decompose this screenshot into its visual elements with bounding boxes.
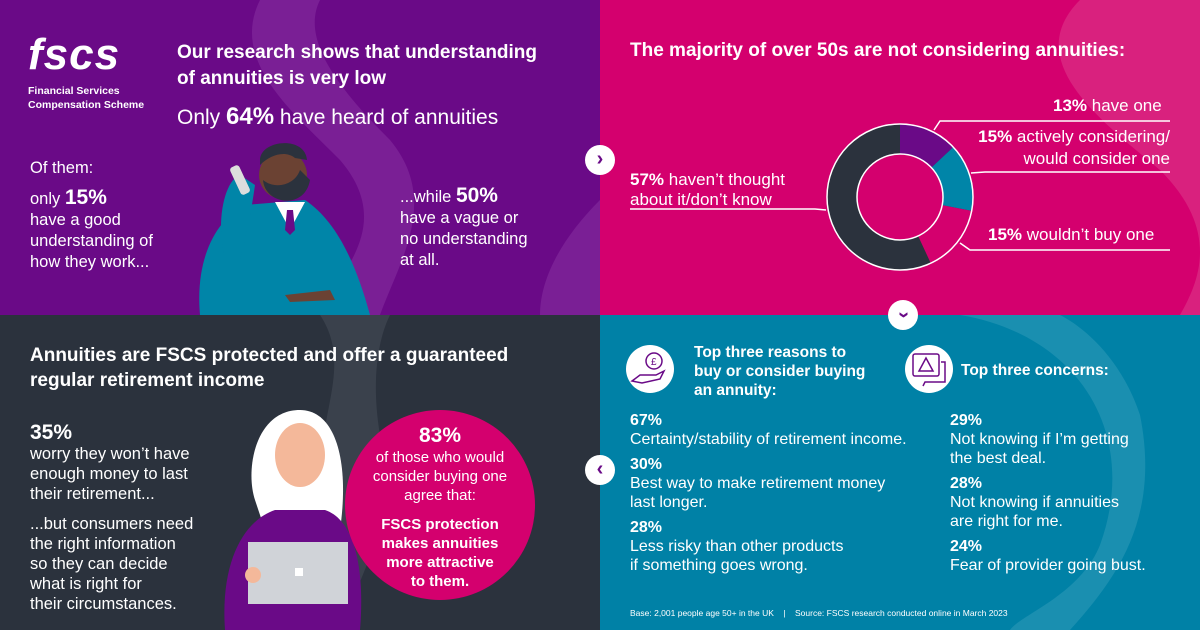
text: 50% vague: ...while 50% <box>400 184 498 207</box>
text: 15% good understanding: how they work... <box>30 253 149 271</box>
text: 15% good understanding: only 15% <box>30 186 107 209</box>
logo <box>28 30 144 111</box>
text: 35% worry: ...but consumers need <box>30 515 193 533</box>
list: concerns: Not knowing if I’m getting <box>950 431 1129 448</box>
logo: fscs <box>28 30 120 79</box>
arrow: left <box>585 455 615 485</box>
panel: understanding (purple) <box>0 0 600 315</box>
stat: 64% heard: Only 64% have heard of annuities <box>177 103 498 130</box>
panel: annuities consideration (magenta) <box>600 0 1200 315</box>
list: concerns: Fear of provider going bust. <box>950 557 1146 574</box>
callout: 83% circle: FSCS protection <box>381 516 499 533</box>
heading: Annuities are FSCS protected and offer a guaranteed <box>30 345 508 366</box>
list: concerns <box>950 412 1146 574</box>
heading: top three reasons: buy or consider buying <box>694 363 865 380</box>
list: concerns: the best deal. <box>950 450 1046 467</box>
text: 50% vague <box>400 184 528 269</box>
callout: 83% circle: to them. <box>411 573 469 590</box>
heading: top three concerns: Top three concerns: <box>961 362 1109 379</box>
list: reasons: Certainty/stability of retirement income. <box>630 431 907 448</box>
callout: 83% circle: agree that: <box>404 487 476 504</box>
text: 50% vague: at all. <box>400 251 439 269</box>
heading: top three reasons: an annuity: <box>694 382 777 399</box>
label: 13%: 13% have one <box>1053 96 1162 115</box>
arrow: right <box>585 145 615 175</box>
callout: 83% circle: consider buying one <box>373 468 507 485</box>
list: reasons: 67% <box>630 412 662 429</box>
icon: hand with pound coin <box>626 345 674 393</box>
arrow: right: › <box>597 148 603 170</box>
arrow: left: ‹ <box>597 458 603 480</box>
text: 15% good understanding: understanding of <box>30 232 153 250</box>
text: 50% vague: no understanding <box>400 230 528 248</box>
logo: Financial Services <box>28 85 120 97</box>
label: 15% considering: 15% actively considering/ <box>978 127 1170 146</box>
icon: hand with pound coin: £ <box>651 357 657 368</box>
list: concerns: 28% <box>950 475 982 492</box>
icon: warning speech bubble <box>905 345 953 393</box>
text: 50% vague: have a vague or <box>400 209 518 227</box>
text: 35% worry: enough money to last <box>30 465 188 483</box>
text: 35% worry: 35% <box>30 421 72 444</box>
list: reasons: 30% <box>630 456 662 473</box>
callout: 83% circle: more attractive <box>386 554 494 571</box>
callout: 83% circle: makes annuities <box>382 535 498 552</box>
list: concerns: are right for me. <box>950 513 1063 530</box>
heading: The majority of over 50s are not considering annuities: <box>630 40 1125 61</box>
list: reasons: Less risky than other products <box>630 538 843 555</box>
text: 15% good understanding: Of them: <box>30 159 93 177</box>
text: 35% worry: worry they won’t have <box>30 445 190 463</box>
logo: Compensation Scheme <box>28 99 144 111</box>
heading: regular retirement income <box>30 370 264 391</box>
list: reasons: if something goes wrong. <box>630 557 808 574</box>
arrow: down <box>888 300 918 330</box>
label: 57% <box>630 170 785 209</box>
list: reasons: 28% <box>630 519 662 536</box>
list: concerns: 24% <box>950 538 982 555</box>
text: 35% worry: the right information <box>30 535 176 553</box>
panel: FSCS protected (dark) <box>0 315 600 630</box>
label: 57%: about it/don’t know <box>630 190 772 209</box>
text: 35% worry <box>30 421 193 613</box>
heading <box>30 345 508 391</box>
text: 35% worry: their retirement... <box>30 485 155 503</box>
text: 35% worry: their circumstances. <box>30 595 177 613</box>
illustration: woman with laptop <box>224 410 362 630</box>
heading: top three reasons: Top three reasons to <box>694 344 846 361</box>
callout: 83% circle <box>345 410 535 600</box>
label: 57%: 57% haven’t thought <box>630 170 785 189</box>
heading: of annuities is very low <box>177 68 386 89</box>
list: concerns: Not knowing if annuities <box>950 494 1119 511</box>
heading <box>177 42 537 89</box>
callout: 83% circle: of those who would <box>376 449 504 466</box>
donut chart <box>630 120 1170 271</box>
list: reasons: last longer. <box>630 494 707 511</box>
text: 35% worry: so they can decide <box>30 555 168 573</box>
illustration: man on phone <box>199 143 370 315</box>
label: 15% considering <box>978 127 1170 168</box>
list: reasons: Best way to make retirement money <box>630 475 885 492</box>
arrow: down: › <box>893 312 915 318</box>
list: concerns: 29% <box>950 412 982 429</box>
heading: Our research shows that understanding <box>177 42 537 63</box>
label: 15% wouldn't: 15% wouldn’t buy one <box>988 225 1154 244</box>
text: 35% worry: what is right for <box>30 575 142 593</box>
heading: top three reasons <box>694 344 865 399</box>
text: 15% good understanding: have a good <box>30 211 121 229</box>
callout: 83% circle: 83% <box>419 424 461 447</box>
footnote: Base: 2,001 people age 50+ in the UK | Source: FSCS research conducted online in March 2023 <box>630 608 1008 618</box>
text: 15% good understanding <box>30 159 153 271</box>
list: reasons <box>630 412 907 574</box>
label: 15% considering: would consider one <box>1024 149 1170 168</box>
panel: reasons and concerns (teal) <box>600 315 1200 630</box>
